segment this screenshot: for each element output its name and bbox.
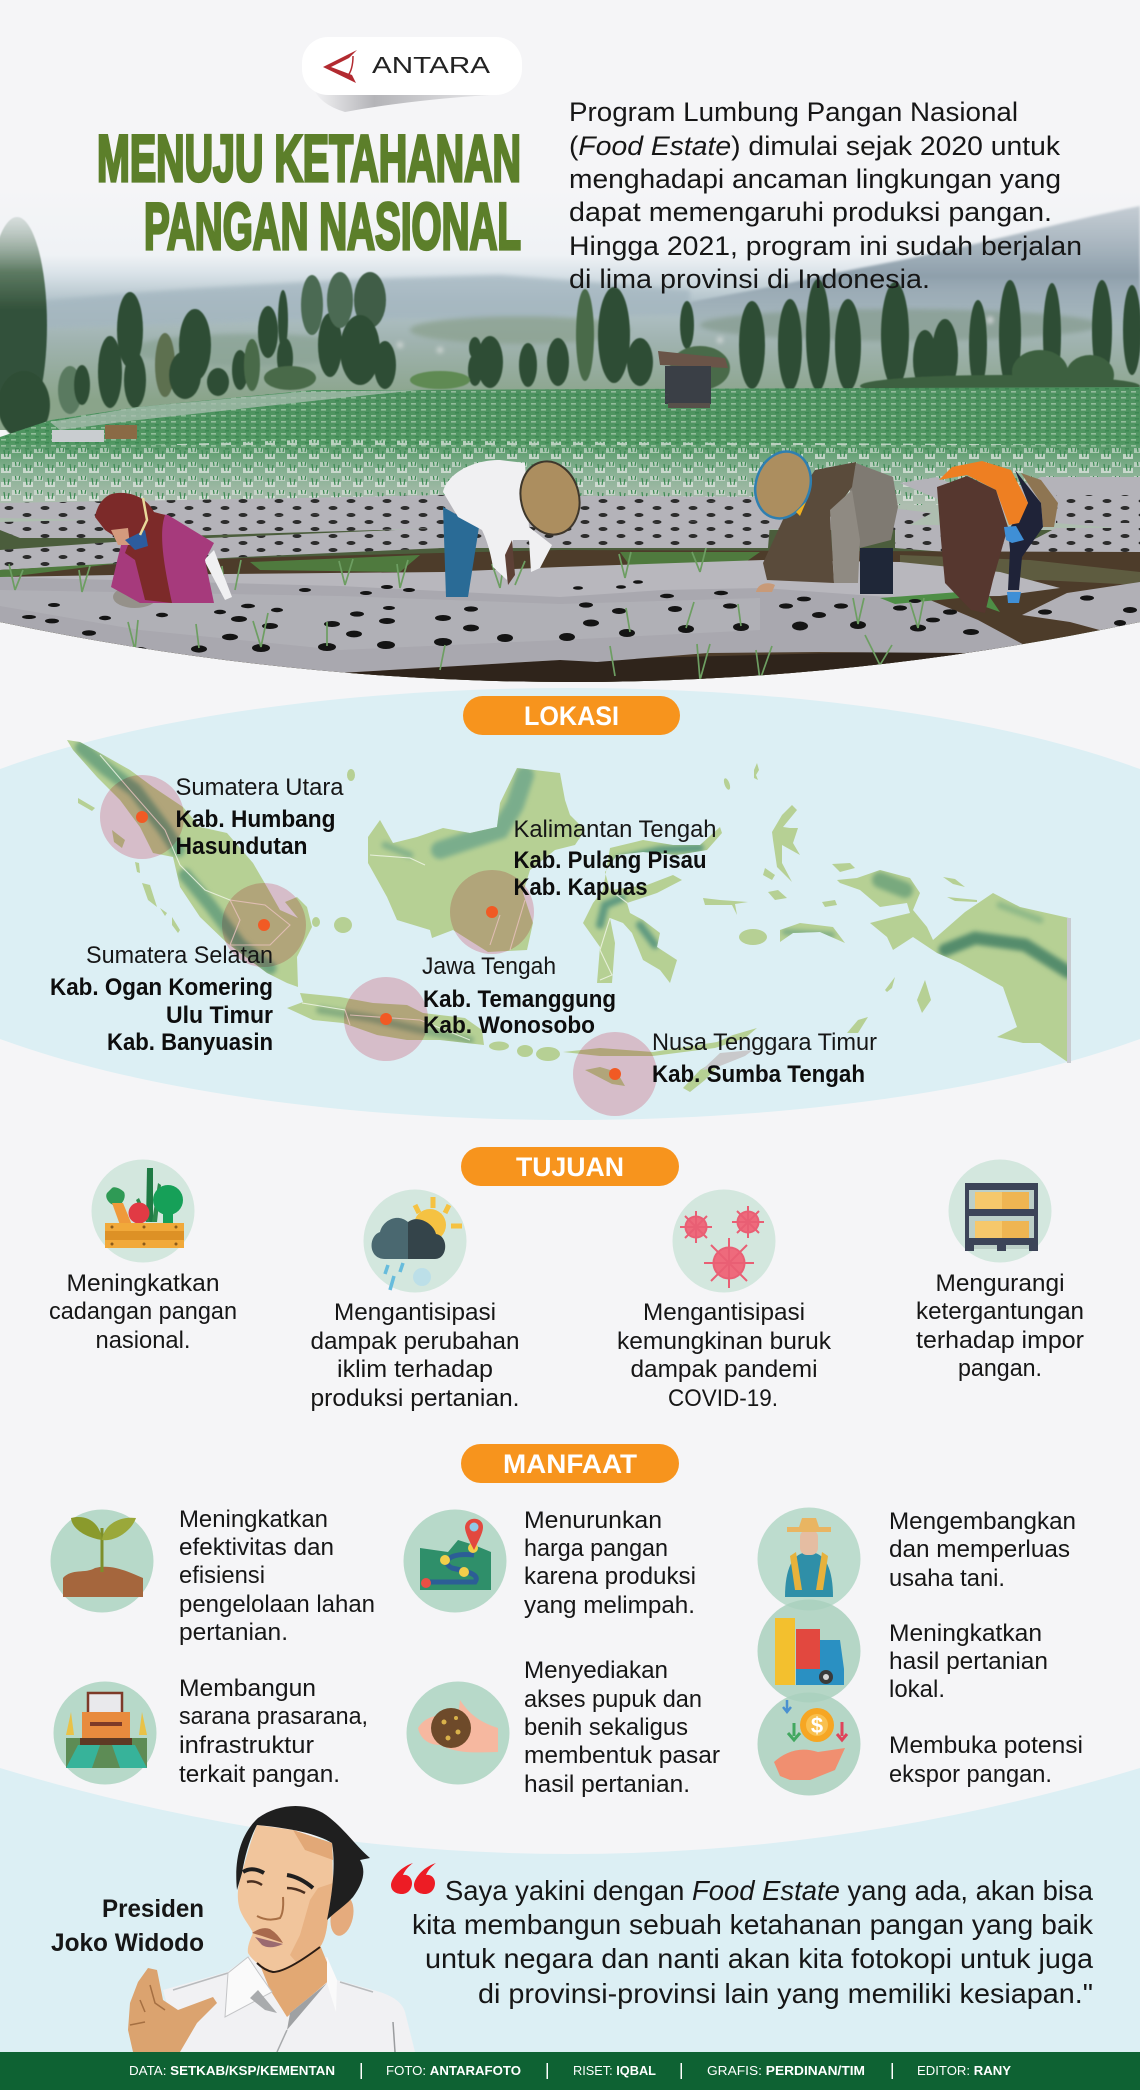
- location marker: Sumatera Selatan: [222, 883, 306, 967]
- text: Membangun: [179, 1675, 316, 1702]
- map label: Kalimantan Tengah: Kab. Kapuas: [514, 874, 648, 901]
- text: [889, 1732, 1083, 1788]
- map label: Kalimantan Tengah: [514, 816, 716, 901]
- text: Meningkatkan: [66, 1270, 220, 1297]
- title: [97, 121, 521, 263]
- text: [524, 1657, 720, 1798]
- farmer 2: [443, 455, 587, 597]
- text: pengelolaan lahan: [179, 1591, 375, 1618]
- collar: [225, 1957, 272, 2017]
- tujuan item 1: food reserves: [49, 1160, 237, 1354]
- manfaat item: farm business: [758, 1508, 1076, 1610]
- icon: coin and hand: $: [811, 1713, 823, 1738]
- main front row: [0, 577, 1030, 673]
- footer credits: GRAFIS: PERDINAN/TIM: [707, 2063, 865, 2078]
- text: ketergantungan: [916, 1298, 1084, 1325]
- map label: Sumatera Selatan: Sumatera Selatan: [86, 942, 273, 969]
- icon: vegetable crate: [92, 1160, 194, 1262]
- icon: storage shelf: [948, 1160, 1052, 1262]
- text: ekspor pangan.: [889, 1761, 1052, 1788]
- text: dampak pandemi: [630, 1356, 818, 1383]
- map of Indonesia: [67, 740, 1071, 1092]
- map label: Sumatera Utara: Sumatera Utara: [176, 774, 344, 801]
- farmer 1: [95, 493, 232, 608]
- footer credits: FOTO: ANTARAFOTO: [386, 2063, 521, 2078]
- panel: lokasi map background: [0, 688, 1140, 1120]
- map label: Jawa Tengah: Jawa Tengah: [422, 953, 556, 980]
- logo: ANTARA: [302, 37, 522, 112]
- tujuan item 3: pandemic: [617, 1190, 832, 1412]
- photo: farmers planting in the field: [0, 190, 1140, 700]
- text: Mengurangi: [936, 1270, 1064, 1297]
- text: hasil pertanian.: [524, 1771, 690, 1798]
- text: infrastruktur: [179, 1732, 314, 1759]
- road and border lines: [100, 755, 630, 1040]
- map label: Sumatera Utara: Hasundutan: [176, 833, 308, 860]
- text: terkait pangan.: [179, 1761, 340, 1788]
- text: [916, 1270, 1084, 1382]
- location marker: Nusa Tenggara Timur: [573, 1032, 657, 1116]
- text: [179, 1506, 375, 1646]
- footer credits: [0, 2052, 1140, 2090]
- planting holes: [7, 580, 1137, 653]
- footer credits: RISET: IQBAL: [573, 2063, 656, 2078]
- heading: tujuan: TUJUAN: [516, 1152, 624, 1182]
- text: [889, 1508, 1076, 1592]
- text: kemungkinan buruk: [617, 1328, 832, 1355]
- manfaat item: local harvest: [758, 1600, 1048, 1703]
- manfaat item: fertilizer and seed: [406, 1657, 720, 1798]
- manfaat item: land management: [50, 1506, 375, 1646]
- text: benih sekaligus: [524, 1714, 688, 1741]
- mouth: [252, 1928, 283, 1943]
- intro paragraph: dapat memengaruhi produksi pangan.: [569, 197, 1052, 227]
- brows and eyes: [243, 1869, 313, 1888]
- plastic mulch rows: [0, 530, 1140, 682]
- text: produksi pertanian.: [310, 1385, 520, 1412]
- map label: Jawa Tengah: Kab. Wonosobo: [423, 1012, 595, 1039]
- icon: quotation mark: [391, 1863, 436, 1894]
- icon: sprout: [50, 1510, 154, 1612]
- icon: map with pin: [404, 1510, 506, 1612]
- text: sarana prasarana,: [179, 1703, 368, 1730]
- logo: ANTARA: ANTARA: [372, 52, 491, 78]
- terrain shading: [82, 748, 1068, 1040]
- text: Mengembangkan: [889, 1508, 1076, 1535]
- text: [617, 1299, 832, 1412]
- text: karena produksi: [524, 1563, 696, 1590]
- intro paragraph: (Food Estate ) dimulai sejak 2020 untuk: [569, 131, 1061, 161]
- text: [179, 1675, 368, 1788]
- quote text: [412, 1875, 1094, 2009]
- text: [310, 1299, 520, 1412]
- footer credits: EDITOR: RANY: [917, 2063, 1011, 2078]
- ear: [327, 1894, 357, 1938]
- text: [49, 1270, 237, 1354]
- text: efektivitas dan: [179, 1534, 334, 1561]
- text: nasional.: [96, 1327, 190, 1354]
- farmer 3: [747, 444, 898, 594]
- map label: Nusa Tenggara Timur: [652, 1029, 877, 1088]
- panel: quote background: [0, 1768, 1140, 2052]
- presenter name: [51, 1895, 204, 1957]
- text: Membuka potensi: [889, 1732, 1083, 1759]
- heading: lokasi: LOKASI: [524, 701, 619, 731]
- icon: hand holding seeds: [406, 1682, 510, 1784]
- title: PANGAN NASIONAL: [144, 189, 521, 263]
- intro paragraph: [569, 97, 1082, 294]
- quote text: untuk negara dan nanti akan kita fotokopi untuk juga: [425, 1943, 1093, 1974]
- text: terhadap impor: [916, 1327, 1084, 1354]
- farmer 4: [937, 461, 1058, 613]
- text: efisiensi: [179, 1562, 265, 1589]
- shed: [658, 351, 728, 408]
- footer credits: DATA: SETKAB/KSP/KEMENTAN: [129, 2063, 335, 2078]
- text: lokal.: [889, 1676, 945, 1703]
- map label: Kalimantan Tengah: Kab. Pulang Pisau: [514, 847, 706, 874]
- hair: [236, 1806, 370, 1920]
- nose: [257, 1897, 283, 1920]
- heading: manfaat: MANFAAT: [503, 1449, 638, 1479]
- map label: Sumatera Selatan: Ulu Timur: [166, 1002, 273, 1029]
- land masses: [67, 740, 1069, 1092]
- map label: Jawa Tengah: Kab. Temanggung: [423, 986, 616, 1013]
- text: akses pupuk dan: [524, 1686, 702, 1713]
- location marker: Sumatera Utara: [100, 775, 184, 859]
- quote text: kita membangun sebuah ketahanan pangan yang baik: [412, 1909, 1094, 1940]
- manfaat item: infrastructure: [54, 1675, 368, 1788]
- map label: Sumatera Selatan: Kab. Ogan Komering: [50, 974, 273, 1001]
- text: COVID-19.: [668, 1385, 778, 1412]
- text: Meningkatkan: [889, 1620, 1042, 1647]
- text: pangan.: [958, 1355, 1042, 1382]
- icon: cloud with sun and rain: [364, 1190, 466, 1292]
- map label: Nusa Tenggara Timur: Nusa Tenggara Timur: [652, 1029, 877, 1056]
- tujuan item 2: climate: [310, 1190, 520, 1412]
- face: [238, 1825, 333, 1972]
- quote text: di provinsi-provinsi lain yang memiliki kesiapan.": [478, 1978, 1093, 2009]
- shirt: [163, 1957, 415, 2052]
- location marker: Kalimantan Tengah: [450, 870, 534, 954]
- intro paragraph: menghadapi ancaman lingkungan yang: [569, 164, 1061, 194]
- heading: manfaat: [461, 1444, 679, 1483]
- icon: truck: [758, 1600, 860, 1702]
- map label: Sumatera Selatan: [50, 942, 273, 1056]
- text: pertanian.: [179, 1619, 288, 1646]
- text: [524, 1507, 696, 1619]
- text: Meningkatkan: [179, 1506, 328, 1533]
- back band of main row: [0, 560, 1060, 600]
- icon: viruses: [672, 1190, 776, 1292]
- text: [889, 1620, 1048, 1703]
- text: Menurunkan: [524, 1507, 662, 1534]
- presenter name: Presiden: [102, 1895, 204, 1923]
- text: yang melimpah.: [524, 1592, 695, 1619]
- map label: Nusa Tenggara Timur: Kab. Sumba Tengah: [652, 1061, 865, 1088]
- text: usaha tani.: [889, 1565, 1005, 1592]
- tujuan item 4: storage shelf: [916, 1160, 1084, 1382]
- text: iklim terhadap: [337, 1356, 493, 1383]
- text: cadangan pangan: [49, 1298, 237, 1325]
- text: hasil pertanian: [889, 1648, 1048, 1675]
- title: MENUJU KETAHANAN: [97, 121, 521, 195]
- heading: tujuan: [461, 1147, 679, 1186]
- portrait: Presiden Joko Widodo: [128, 1806, 415, 2052]
- text: harga pangan: [524, 1535, 668, 1562]
- text: membentuk pasar: [524, 1742, 720, 1769]
- presenter name: Joko Widodo: [51, 1929, 204, 1957]
- icon: farmer: [758, 1508, 860, 1610]
- icon: coin and hand: [758, 1692, 860, 1796]
- map label: Sumatera Utara: [176, 774, 344, 860]
- heading: lokasi: [463, 696, 680, 735]
- text: Menyediakan: [524, 1657, 668, 1684]
- icon: tractor in field: [54, 1682, 156, 1784]
- quote text: Saya yakini dengan Food Estate yang ada, akan bisa: [445, 1875, 1093, 1906]
- text: Mengantisipasi: [643, 1299, 805, 1326]
- map label: Jawa Tengah: [422, 953, 616, 1039]
- map label: Sumatera Selatan: Kab. Banyuasin: [107, 1029, 273, 1056]
- hand: [128, 1968, 217, 2052]
- location marker: Jawa Tengah: [344, 977, 428, 1061]
- map label: Sumatera Utara: Kab. Humbang: [176, 806, 336, 833]
- intro paragraph: di lima provinsi di Indonesia.: [569, 264, 930, 294]
- neck: [260, 1945, 333, 2017]
- manfaat item: food prices: [404, 1507, 696, 1619]
- text: Mengantisipasi: [334, 1299, 496, 1326]
- manfaat item: export: [758, 1692, 1083, 1796]
- intro paragraph: Hingga 2021, program ini sudah berjalan: [569, 231, 1082, 261]
- text: dampak perubahan: [310, 1328, 520, 1355]
- intro paragraph: Program Lumbung Pangan Nasional: [569, 97, 1018, 127]
- map label: Kalimantan Tengah: Kalimantan Tengah: [514, 816, 716, 843]
- text: dan memperluas: [889, 1536, 1070, 1563]
